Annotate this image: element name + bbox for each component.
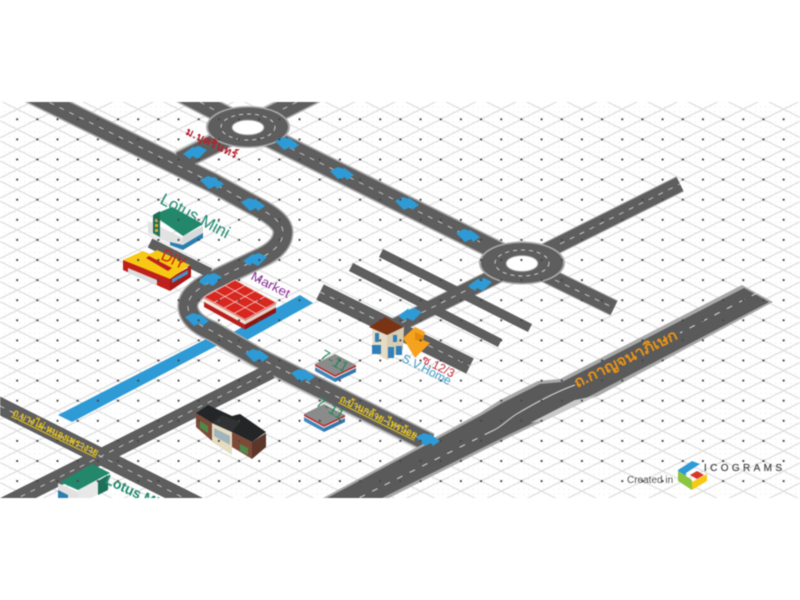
icon: orange location marker — [403, 327, 430, 358]
building: DIY — [123, 250, 191, 291]
label: Lotus Mini: Lotus Mini — [157, 190, 233, 242]
icon: Icograms logo — [678, 461, 707, 490]
roundabout 2 — [479, 242, 565, 284]
label: soi 12/3: ซ.12/3 — [420, 352, 457, 381]
store: 7-11 upper — [315, 354, 356, 382]
background grid — [0, 102, 800, 498]
highway — [310, 285, 773, 505]
label: Bang Phai road: ถ.บางไผ่-หนองเพรางาย — [11, 406, 101, 459]
building: Lotus Mini bottom — [57, 464, 110, 499]
label: Lotus Mini bottom: Lotus Mini — [103, 471, 173, 515]
roundabout 1 — [206, 106, 290, 148]
dots overlay — [15, 118, 786, 483]
label: Market: Market — [249, 269, 293, 301]
credit: Created in: Created in — [627, 475, 673, 486]
canal: blue water strip — [58, 295, 313, 422]
label: S.V.Home: S.V.Home — [400, 351, 454, 388]
road network — [0, 87, 680, 509]
label: DIY: DIY — [158, 245, 189, 273]
label: Kanchanaphisek road: ถ.กาญจนาภิเษก — [571, 326, 680, 392]
building: S.V.Home house — [369, 317, 404, 360]
store: 7-11 lower — [304, 404, 345, 432]
label: Ban Kluai-Sai Noi road: ถ.บ้านกล้วย-ไทรน้อย — [338, 392, 419, 442]
label: 7-11 lower: 7-11 — [313, 394, 347, 423]
building: Market stalls — [204, 280, 276, 330]
label: Bussarin village: ม.บุศรินทร์ — [183, 125, 240, 162]
building: school — [196, 405, 266, 459]
building: Lotus Mini — [148, 207, 203, 250]
label: 7-11 upper: 7-11 — [317, 347, 351, 376]
brand: ICOGRAMS: ICOGRAMS — [704, 463, 782, 474]
isometric map — [0, 101, 800, 499]
direction arrows — [183, 137, 492, 446]
